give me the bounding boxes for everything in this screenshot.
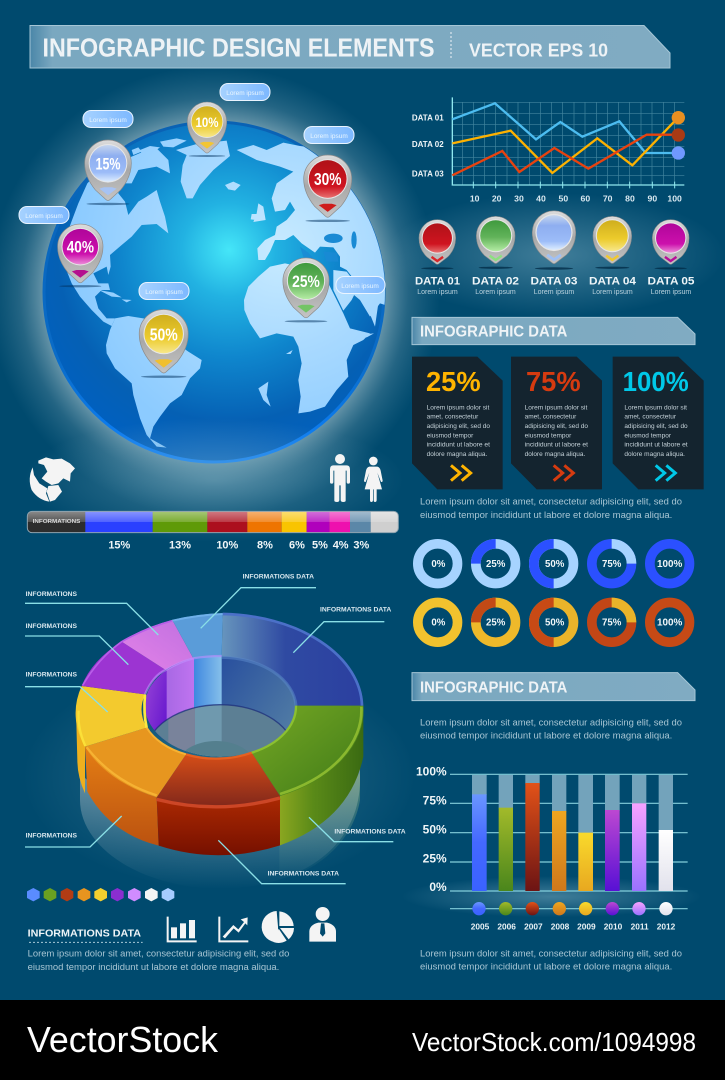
axis labels: 90	[648, 194, 657, 204]
axis labels: 30	[514, 194, 524, 204]
paragraph	[420, 497, 682, 520]
card 100%	[613, 357, 704, 489]
card 25%: Lorem ipsum dolor sit	[427, 404, 489, 411]
series labels: DATA 02	[412, 140, 444, 149]
years: 2010	[604, 921, 623, 931]
card 75%: dolore magna aliqua.	[525, 451, 585, 458]
data pin labels: Lorem ipsum	[592, 289, 633, 296]
icon: person	[309, 907, 336, 942]
hexagon legend	[27, 888, 174, 901]
y axis labels: 100%	[416, 765, 447, 779]
description: Lorem ipsum dolor sit amet, consectetur adipisicing elit, sed do	[28, 949, 289, 959]
map pin 10%	[187, 102, 227, 157]
axis labels: 10	[470, 194, 480, 204]
rim highlights	[280, 707, 361, 794]
y axis labels	[416, 765, 447, 894]
years: 2011	[631, 921, 649, 931]
axis labels: 20	[492, 194, 502, 204]
icon: globe	[30, 457, 75, 502]
donut row orange labels: 25%	[486, 618, 506, 629]
card 25%: incididunt ut labore et	[427, 442, 490, 449]
paragraph top: eiusmod tempor incididunt ut labore et dolore magna aliqua.	[420, 731, 672, 741]
card 100%: incididunt ut labore et	[624, 442, 688, 449]
years: 2007	[524, 921, 543, 931]
card 100%: eiusmod tempor	[624, 432, 672, 439]
data pin labels: Lorem ipsum	[475, 289, 516, 296]
card 100%: dolore magna aliqua.	[624, 451, 685, 458]
data pin labels	[415, 276, 694, 296]
map pin 25%: 25%	[292, 273, 320, 291]
donut row blue labels: 75%	[602, 559, 622, 570]
data pin red	[419, 220, 456, 269]
years: 2006	[497, 921, 516, 931]
y axis labels: 75%	[423, 794, 447, 808]
y axis labels: 0%	[429, 880, 447, 894]
progress bar percentages: 5%	[312, 540, 328, 552]
data pin labels: DATA 03	[530, 276, 578, 288]
data pin green	[476, 216, 515, 269]
card 25%: amet, consectetur	[427, 414, 479, 421]
donut row orange labels	[431, 618, 683, 629]
progress bar percentages: 6%	[289, 540, 305, 552]
3D donut chart	[23, 574, 416, 890]
progress bar percentages: 4%	[333, 540, 349, 552]
axis labels: 100	[667, 194, 682, 204]
callout labels	[26, 574, 406, 877]
card 25%	[412, 357, 503, 489]
bottom left section	[27, 888, 336, 972]
infographic data panel	[412, 317, 704, 642]
section heading: INFOGRAPHIC DATA	[420, 324, 568, 341]
data pin labels: DATA 02	[472, 276, 519, 288]
years	[471, 921, 676, 931]
callout labels: INFORMATIONS DATA	[268, 870, 339, 877]
reflection	[80, 767, 360, 888]
years: 2009	[577, 921, 596, 931]
icon: woman	[364, 457, 383, 502]
progress bar percentages: 8%	[257, 540, 273, 552]
map label pills	[19, 84, 385, 300]
card 75%	[511, 357, 602, 489]
callout labels: INFORMATIONS DATA	[320, 607, 392, 614]
donut row orange	[418, 602, 689, 642]
callout labels: INFORMATIONS DATA	[243, 574, 314, 581]
axis labels: 70	[603, 194, 613, 204]
map label pills: Lorem ipsum	[89, 117, 127, 124]
map pin 50%: 50%	[150, 324, 178, 344]
years: 2012	[657, 921, 676, 931]
map pin 25%	[283, 258, 329, 322]
map pin 10%: 10%	[195, 114, 219, 130]
progress bar percentages: 10%	[216, 540, 239, 552]
callout labels: INFORMATIONS	[26, 672, 78, 679]
data pin yellow	[593, 216, 632, 269]
axis labels: 60	[581, 194, 590, 204]
card 75%: amet, consectetur	[525, 414, 577, 421]
data pin labels: DATA 01	[415, 276, 460, 288]
callout labels: INFORMATIONS	[26, 591, 78, 598]
card 25%: adipisicing elit, sed do	[427, 423, 490, 430]
donut row orange labels: 75%	[602, 618, 622, 629]
card 75%: adipisicing elit, sed do	[525, 423, 588, 430]
series labels: DATA 03	[412, 169, 444, 178]
donut row orange labels: 50%	[545, 618, 565, 629]
data pin magenta	[652, 220, 689, 269]
donut row blue labels: 100%	[657, 559, 683, 570]
paragraph bottom	[420, 948, 682, 972]
map pin 40%	[58, 224, 103, 287]
callout labels: INFORMATIONS	[26, 833, 78, 840]
map pin 30%	[304, 155, 352, 222]
donut row orange labels: 0%	[431, 618, 446, 629]
data pin labels: Lorem ipsum	[534, 289, 574, 296]
data pin labels: DATA 04	[589, 276, 637, 288]
card 75%: eiusmod tempor	[525, 432, 572, 439]
icon: line chart	[218, 917, 248, 942]
years: 2008	[551, 921, 570, 931]
paragraph: eiusmod tempor incididunt ut labore et dolore magna aliqua.	[420, 510, 672, 520]
data pin labels: Lorem ipsum	[417, 289, 458, 296]
timeline	[450, 902, 688, 931]
donut row blue labels: 25%	[486, 559, 506, 570]
axis labels: 40	[536, 194, 546, 204]
donut row blue labels: 50%	[545, 559, 565, 570]
outer walls	[76, 710, 85, 793]
top slices	[222, 613, 363, 706]
globe map	[0, 66, 440, 518]
title banner	[30, 26, 670, 68]
axis labels: 80	[625, 194, 635, 204]
map pin 15%	[85, 140, 131, 205]
data pin labels: Lorem ipsum	[651, 289, 691, 296]
map pin 30%: 30%	[314, 169, 341, 189]
data pin labels: DATA 05	[648, 276, 694, 288]
footer logo: VectorStock	[27, 1019, 219, 1060]
infographic data chart panel	[402, 673, 702, 972]
continents	[64, 138, 400, 448]
map pin 50%	[139, 310, 188, 378]
progress bar percentages: 13%	[169, 540, 191, 552]
callout labels: INFORMATIONS DATA	[334, 828, 406, 835]
map label pills: Lorem ipsum	[226, 90, 264, 97]
axis labels	[470, 194, 682, 204]
footer bar	[0, 1000, 725, 1080]
card 75%: 75%	[526, 366, 581, 397]
section heading: INFOGRAPHIC DATA	[420, 679, 568, 696]
card 75%: incididunt ut labore et	[525, 442, 588, 449]
paragraph bottom: eiusmod tempor incididunt ut labore et dolore magna aliqua.	[420, 962, 672, 972]
y axis labels: 50%	[423, 823, 447, 837]
hole	[146, 654, 296, 757]
subtitle text: VECTOR EPS 10	[469, 40, 608, 61]
title text: INFOGRAPHIC DESIGN ELEMENTS	[42, 33, 434, 63]
card 75%: Lorem ipsum dolor sit	[525, 404, 587, 411]
donut row blue labels	[431, 559, 683, 570]
legend glow	[24, 418, 404, 542]
map label pills: Lorem ipsum	[25, 213, 63, 220]
y axis labels: 25%	[423, 851, 447, 865]
callout labels: INFORMATIONS	[26, 623, 78, 630]
share section	[27, 454, 398, 552]
right column upper glow	[385, 193, 725, 317]
map label pills: Lorem ipsum	[341, 283, 379, 290]
progress bar	[27, 511, 398, 533]
paragraph: Lorem ipsum dolor sit amet, consectetur adipisicing elit, sed do	[420, 497, 682, 507]
card 25%: 25%	[426, 366, 481, 397]
paragraph top: Lorem ipsum dolor sit amet, consectetur adipisicing elit, sed do	[420, 717, 682, 727]
card 100%: amet, consectetur	[624, 414, 677, 421]
heading: INFORMATIONS DATA	[28, 929, 142, 940]
paragraph bottom: Lorem ipsum dolor sit amet, consectetur adipisicing elit, sed do	[420, 948, 682, 958]
footer url: VectorStock.com/1094998	[412, 1027, 696, 1057]
card 100%: Lorem ipsum dolor sit	[624, 404, 687, 411]
data pins row	[415, 211, 694, 296]
series labels: DATA 01	[412, 113, 444, 122]
map label pills: Lorem ipsum	[145, 289, 183, 296]
progress bar percentages	[108, 540, 369, 552]
card 25%: dolore magna aliqua.	[427, 451, 487, 458]
line chart	[412, 97, 685, 204]
progress bar percentages: 15%	[108, 540, 131, 552]
icon: man	[330, 454, 350, 502]
section heading	[412, 317, 695, 345]
map pin 40%: 40%	[67, 239, 94, 257]
map label pills: Lorem ipsum	[310, 133, 348, 140]
icon: bar chart	[167, 917, 197, 942]
progress bar: INFORMATIONS	[33, 519, 81, 525]
axis labels: 50	[559, 194, 568, 204]
icon: pie chart	[262, 911, 294, 943]
section heading	[412, 673, 695, 701]
description	[28, 949, 289, 972]
stacked bar chart	[416, 765, 688, 894]
card 100%: 100%	[623, 366, 689, 397]
data pin blue	[532, 211, 576, 270]
donut row blue labels: 0%	[431, 559, 446, 570]
series labels	[412, 113, 444, 178]
map pin 15%: 15%	[96, 154, 121, 173]
card 100%: adipisicing elit, sed do	[624, 423, 688, 430]
card 25%: eiusmod tempor	[427, 432, 474, 439]
donut row orange labels: 100%	[657, 618, 683, 629]
years: 2005	[471, 921, 490, 931]
progress bar percentages: 3%	[353, 540, 369, 552]
paragraph top	[420, 717, 682, 741]
callout lines	[25, 588, 393, 884]
description: eiusmod tempor incididunt ut labore et dolore magna aliqua.	[28, 962, 279, 972]
donut row blue	[418, 544, 689, 583]
